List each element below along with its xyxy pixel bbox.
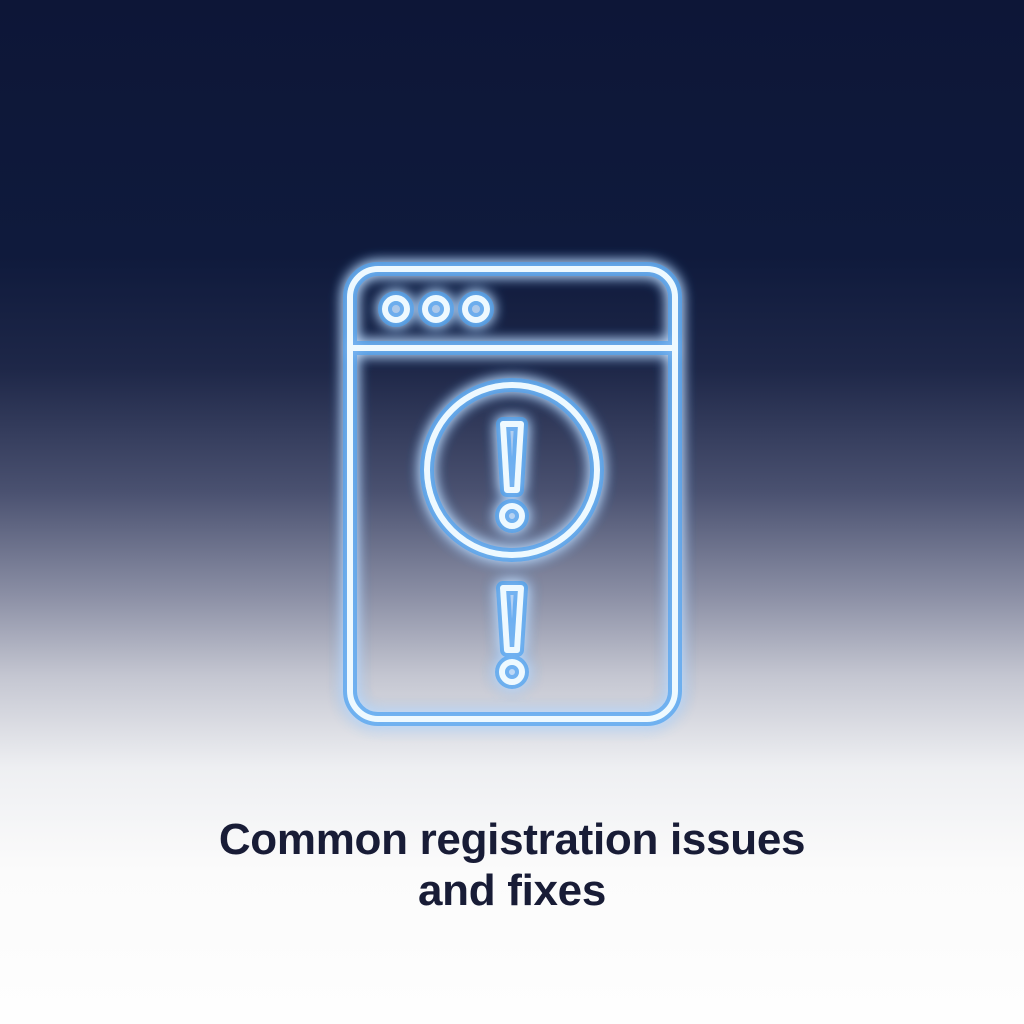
- title: and fixes: [418, 866, 606, 915]
- title: Common registration issues: [219, 815, 805, 864]
- title: [219, 815, 805, 915]
